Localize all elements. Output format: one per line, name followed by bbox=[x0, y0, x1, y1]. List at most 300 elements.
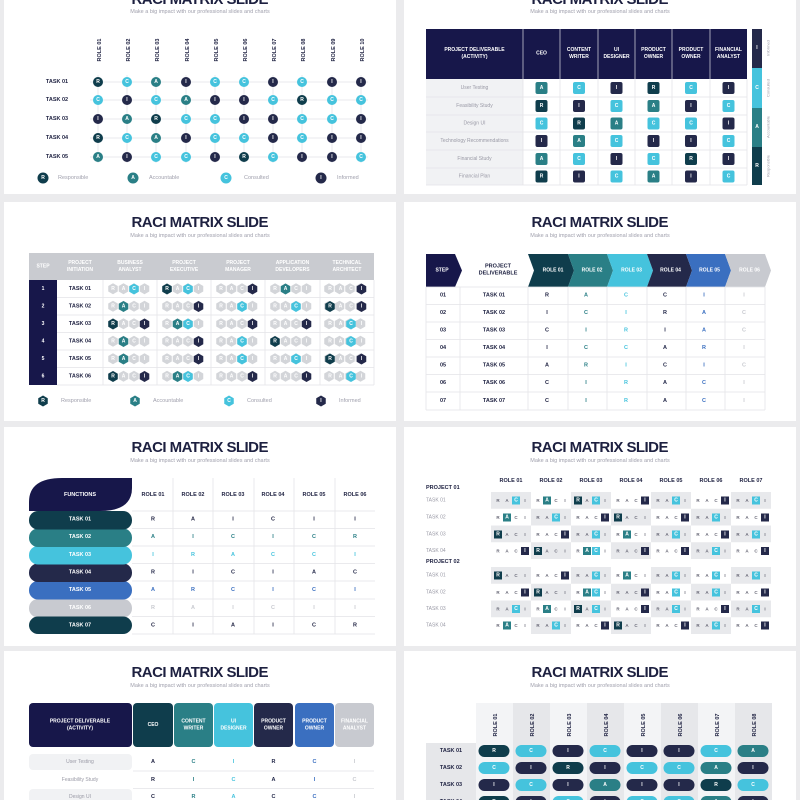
table body: R bbox=[584, 362, 588, 368]
pill grid: CIRICCAI bbox=[492, 765, 754, 771]
table body: I bbox=[585, 380, 587, 386]
table body: C bbox=[742, 310, 746, 316]
table body: TASK 06 bbox=[483, 380, 505, 386]
task labels: TASK 05 bbox=[46, 154, 68, 160]
table body: 07 bbox=[440, 398, 446, 404]
role headers: ROLE 01 bbox=[97, 39, 103, 61]
table body: TASK 02 bbox=[483, 310, 505, 316]
role table: RAICII bbox=[151, 516, 356, 522]
table body: C bbox=[663, 292, 667, 298]
rows: I bbox=[354, 794, 356, 800]
table body: TASK 03 bbox=[483, 328, 505, 334]
hex grid: TASK 06 bbox=[69, 374, 91, 380]
role header columns: ROLE 03 bbox=[567, 714, 573, 736]
table body: R bbox=[702, 345, 706, 351]
table body: I bbox=[743, 398, 745, 404]
table header: DESIGNER bbox=[603, 54, 630, 60]
row 5 bbox=[111, 354, 366, 364]
project labels: TASK 02 bbox=[426, 590, 446, 596]
role table: AICICR bbox=[151, 534, 357, 540]
project 02 grid: RICACCC bbox=[496, 572, 758, 578]
table body: RICAIC bbox=[540, 174, 731, 180]
task labels: TASK 01 bbox=[46, 79, 68, 85]
rows: Design UI bbox=[69, 794, 91, 800]
chevron header: STEP bbox=[435, 268, 449, 274]
legend: I bbox=[320, 175, 322, 181]
role table bbox=[132, 478, 375, 634]
role header columns: ROLE 05 bbox=[641, 714, 647, 736]
panel: slide 6 project checker matrix bbox=[404, 427, 796, 646]
project labels: TASK 02 bbox=[426, 514, 446, 520]
functions column: TASK 07 bbox=[69, 622, 91, 628]
functions column: TASK 01 bbox=[69, 516, 91, 522]
role header columns: ROLE 07 bbox=[715, 714, 721, 736]
role table: CIAICR bbox=[151, 622, 357, 628]
header blocks: OWNER bbox=[305, 726, 324, 732]
task labels: TASK 03 bbox=[440, 782, 462, 788]
table body: TASK 04 bbox=[483, 345, 506, 351]
role headers: ROLE 01 bbox=[500, 478, 522, 484]
legend: Informed bbox=[339, 398, 361, 404]
table header: OWNER bbox=[681, 54, 701, 60]
table body: Technology Recommendations bbox=[440, 138, 509, 144]
project labels: TASK 03 bbox=[426, 532, 446, 538]
role header columns: ROLE 01 bbox=[493, 714, 499, 736]
project 01 grid: ACIRICI bbox=[505, 514, 766, 520]
legend bbox=[38, 396, 361, 406]
legend: Consulted bbox=[244, 175, 269, 181]
subtitle: Make a big impact with our professional slides and charts bbox=[530, 458, 670, 464]
project 01 grid: CARCICIC bbox=[514, 498, 758, 504]
pill grid bbox=[478, 745, 768, 800]
role table: RAICII bbox=[151, 605, 356, 611]
role headers: ROLE 02 bbox=[126, 39, 132, 61]
panel: slide 1 circle matrix bbox=[4, 0, 396, 194]
table header: TECHNICAL bbox=[333, 260, 361, 266]
rows: C bbox=[151, 794, 155, 800]
legend: Accountable bbox=[153, 398, 183, 404]
row 3: RACIRACIRACIRACIRACI bbox=[111, 321, 363, 327]
task labels bbox=[46, 79, 69, 160]
side legend bar: I bbox=[756, 45, 758, 51]
role headers: ROLE 04 bbox=[620, 478, 643, 484]
functions column: TASK 02 bbox=[69, 534, 91, 540]
table header: APPLICATION bbox=[276, 260, 310, 266]
table body: ACICRI bbox=[540, 156, 730, 162]
subtitle: Make a big impact with our professional slides and charts bbox=[130, 458, 270, 464]
rows: C bbox=[353, 777, 357, 783]
header blocks: PROJECT DELIVERABLE bbox=[50, 718, 111, 724]
chevron header: ROLE 06 bbox=[739, 268, 760, 274]
table body: C bbox=[584, 345, 588, 351]
subtitle: Make a big impact with our professional slides and charts bbox=[130, 233, 270, 239]
table body: Financial Study bbox=[457, 156, 492, 162]
rows: Feasibility Study bbox=[62, 777, 99, 783]
table body: RICAIC bbox=[540, 103, 731, 109]
table body: I bbox=[546, 345, 548, 351]
step column: 4 bbox=[42, 338, 45, 344]
project labels: TASK 04 bbox=[426, 548, 446, 554]
table body: TASK 05 bbox=[483, 362, 505, 368]
table header: PROJECT bbox=[172, 260, 196, 266]
functions column: TASK 03 bbox=[69, 552, 91, 558]
hex grid bbox=[57, 280, 374, 385]
table body: C bbox=[663, 362, 667, 368]
rows: C bbox=[192, 759, 196, 765]
subtitle: Make a big impact with our professional slides and charts bbox=[130, 9, 270, 15]
table body: 04 bbox=[440, 345, 447, 351]
table header bbox=[426, 29, 747, 79]
table body: 05 bbox=[440, 362, 446, 368]
table header: INITIATION bbox=[67, 267, 93, 273]
step column: 2 bbox=[42, 304, 45, 310]
hex grid: TASK 05 bbox=[69, 356, 91, 362]
row 1: RACIRACIRACIRACIRACI bbox=[111, 286, 363, 292]
table body: R bbox=[624, 380, 628, 386]
chevron header: ROLE 02 bbox=[582, 268, 603, 274]
circle grid: RCAICCICII bbox=[96, 135, 362, 141]
role table: ROLE 04 bbox=[262, 492, 285, 498]
legend: Responsible bbox=[61, 398, 91, 404]
table body: ACIRCI bbox=[540, 85, 730, 91]
table body: 03 bbox=[440, 328, 446, 334]
pill grid: ICIAIIRC bbox=[493, 782, 755, 788]
table header: PRODUCT bbox=[679, 47, 703, 53]
table body: A bbox=[663, 380, 667, 386]
table body: Design UI bbox=[464, 120, 485, 126]
title: RACI MATRIX SLIDE bbox=[132, 214, 268, 231]
side legend bar: R bbox=[755, 163, 759, 169]
title: RACI MATRIX SLIDE bbox=[532, 664, 668, 681]
table header: MANAGER bbox=[225, 267, 251, 273]
chevron header: PROJECT bbox=[485, 264, 512, 270]
table body: I bbox=[546, 310, 548, 316]
table body: A bbox=[663, 345, 667, 351]
table body bbox=[426, 79, 747, 185]
title: RACI MATRIX SLIDE bbox=[532, 439, 668, 456]
side legend bar: C bbox=[755, 85, 759, 91]
hex grid: TASK 02 bbox=[69, 304, 91, 310]
table body: A bbox=[584, 292, 588, 298]
role header columns bbox=[476, 703, 772, 800]
project 02 grid: RACIRACIRACIRACIRACIRACIRACI bbox=[496, 590, 766, 595]
functions column: FUNCTIONS bbox=[64, 492, 96, 498]
table header: PRODUCT bbox=[641, 47, 666, 53]
role headers: ROLE 06 bbox=[700, 478, 722, 484]
header blocks: (ACTIVITY) bbox=[67, 726, 93, 732]
panel: slide 8 pill matrix bbox=[404, 651, 796, 800]
project 01 grid: IRACIICI bbox=[524, 548, 766, 554]
header blocks: WRITER bbox=[184, 726, 204, 732]
role table: IRACCI bbox=[152, 552, 356, 558]
role headers: ROLE 10 bbox=[360, 39, 366, 61]
role headers: ROLE 03 bbox=[155, 39, 161, 61]
table body: C bbox=[584, 310, 588, 316]
panel: slide 4 chevron header table bbox=[404, 202, 796, 421]
subtitle: Make a big impact with our professional slides and charts bbox=[530, 9, 670, 15]
legend: R bbox=[41, 175, 45, 181]
project 01 grid: RACIRACIRACIRACIRACIRACIRACI bbox=[496, 498, 766, 503]
row 6: RACIRACIRACIRACIRACI bbox=[111, 374, 363, 380]
table body: CRACCI bbox=[540, 120, 730, 126]
table body: C bbox=[624, 292, 628, 298]
table body: I bbox=[743, 380, 745, 386]
project labels bbox=[426, 485, 460, 628]
task labels: TASK 02 bbox=[46, 97, 68, 103]
table body: C bbox=[742, 328, 746, 334]
step column: 6 bbox=[42, 374, 45, 380]
role headers: ROLE 07 bbox=[272, 39, 278, 61]
table body: R bbox=[545, 292, 549, 298]
rows: A bbox=[232, 794, 236, 800]
legend: A bbox=[133, 398, 137, 404]
row 6 bbox=[108, 371, 363, 382]
table body: I bbox=[703, 362, 705, 368]
table body: Financial Plan bbox=[459, 174, 490, 180]
circle grid: IARCCIICCI bbox=[97, 116, 362, 122]
table body: A bbox=[663, 398, 667, 404]
row 2: RACIRACIRACIRACIRACI bbox=[111, 304, 363, 310]
title: RACI MATRIX SLIDE bbox=[532, 214, 668, 231]
project labels: TASK 04 bbox=[426, 622, 446, 628]
legend: Accountable bbox=[149, 175, 179, 181]
hex grid: TASK 01 bbox=[69, 286, 91, 292]
table header: ANALYST bbox=[118, 267, 142, 273]
header blocks: PRODUCT bbox=[261, 718, 286, 724]
row 5: RACIRACIRACIRACIRACI bbox=[111, 356, 363, 362]
project labels: PROJECT 02 bbox=[426, 559, 460, 565]
table header: FINANCIAL bbox=[715, 47, 742, 53]
header blocks: CEO bbox=[148, 722, 159, 728]
table body: C bbox=[545, 328, 549, 334]
chevron header: ROLE 01 bbox=[543, 268, 564, 274]
table body: I bbox=[664, 328, 666, 334]
table body: C bbox=[624, 345, 628, 351]
project 02 grid: ACIRICI bbox=[505, 622, 766, 628]
rows: C bbox=[272, 794, 276, 800]
rows: I bbox=[314, 777, 316, 783]
step column: 1 bbox=[42, 286, 45, 292]
task labels: TASK 03 bbox=[46, 116, 68, 122]
table header: STEP bbox=[36, 264, 50, 270]
table body: TASK 01 bbox=[483, 292, 505, 298]
project labels: PROJECT 01 bbox=[426, 485, 460, 491]
role headers: ROLE 05 bbox=[214, 39, 220, 61]
table header: ANALYST bbox=[717, 54, 740, 60]
role headers: ROLE 03 bbox=[580, 478, 602, 484]
circle grid: AICCIRCIIC bbox=[96, 154, 363, 160]
role table: ROLE 06 bbox=[344, 492, 366, 498]
project 02 grid: IRACICCI bbox=[524, 590, 766, 596]
rows: A bbox=[151, 759, 155, 765]
table body: 02 bbox=[440, 310, 446, 316]
chevron header bbox=[426, 254, 771, 287]
table body: C bbox=[702, 398, 706, 404]
row 2 bbox=[111, 301, 366, 312]
chevron header: ROLE 03 bbox=[621, 268, 642, 274]
role headers: ROLE 09 bbox=[331, 39, 337, 61]
task labels bbox=[426, 743, 476, 800]
step column: 5 bbox=[42, 356, 45, 362]
header blocks: ANALYST bbox=[343, 726, 366, 732]
role table: ROLE 03 bbox=[222, 492, 244, 498]
header blocks: PRODUCT bbox=[302, 718, 327, 724]
table header: PROJECT bbox=[68, 260, 92, 266]
table body: 01 bbox=[440, 292, 446, 298]
step column bbox=[29, 280, 57, 385]
rows: R bbox=[151, 777, 155, 783]
table header: WRITER bbox=[569, 54, 589, 60]
table header: OWNER bbox=[644, 54, 663, 60]
circle grid: RCAICCICII bbox=[96, 79, 362, 85]
side legend bar: Informed bbox=[766, 40, 770, 56]
chevron header: ROLE 04 bbox=[660, 268, 681, 274]
table body: A bbox=[545, 362, 549, 368]
project 02 grid: RACIRACIRACIRACIRACIRACIRACI bbox=[496, 573, 766, 578]
legend: C bbox=[227, 398, 231, 404]
role table: ROLE 05 bbox=[303, 492, 325, 498]
table body bbox=[426, 287, 765, 410]
row 4 bbox=[111, 336, 363, 347]
panel: slide 2 deliverable table with side legend bbox=[404, 0, 796, 194]
table body: I bbox=[743, 292, 745, 298]
project 02 grid: RACIRACIRACIRACIRACIRACIRACI bbox=[496, 623, 766, 628]
role header columns: ROLE 06 bbox=[678, 714, 684, 736]
header blocks: DESIGNER bbox=[220, 726, 247, 732]
header blocks: FINANCIAL bbox=[341, 718, 368, 724]
table body: Feasibility Study bbox=[456, 103, 493, 109]
chevron header: ROLE 05 bbox=[699, 268, 720, 274]
title: RACI MATRIX SLIDE bbox=[132, 439, 268, 456]
panel: slide 5 functions table bbox=[4, 427, 396, 646]
role headers bbox=[97, 38, 366, 61]
role headers: ROLE 08 bbox=[301, 39, 307, 61]
table header: ARCHITECT bbox=[333, 267, 361, 273]
table body: R bbox=[624, 328, 628, 334]
rows: I bbox=[354, 759, 356, 765]
step column: 3 bbox=[42, 321, 45, 327]
row 3 bbox=[108, 318, 363, 330]
legend: R bbox=[41, 398, 45, 404]
row 4: RACIRACIRACIRACIRACI bbox=[111, 338, 363, 344]
task labels: TASK 01 bbox=[440, 748, 462, 754]
panel: slide 3 hexagon matrix bbox=[4, 202, 396, 421]
task labels: TASK 04 bbox=[46, 135, 69, 141]
legend: Informed bbox=[337, 175, 359, 181]
role table: ROLE 02 bbox=[182, 492, 204, 498]
rows: C bbox=[232, 777, 236, 783]
table header: (ACTIVITY) bbox=[461, 54, 488, 60]
task labels: TASK 02 bbox=[440, 765, 462, 771]
role header columns: ROLE 08 bbox=[752, 714, 758, 736]
project labels: TASK 03 bbox=[426, 606, 446, 612]
role headers: ROLE 06 bbox=[243, 39, 249, 61]
table header: BUSINESS bbox=[117, 260, 143, 266]
legend bbox=[38, 172, 359, 184]
table body: I bbox=[585, 328, 587, 334]
role table: ROLE 01 bbox=[142, 492, 164, 498]
table body: IACIIC bbox=[541, 138, 731, 144]
functions column: TASK 06 bbox=[69, 605, 91, 611]
project 02 grid: RACIRACIRACIRACIRACIRACIRACI bbox=[496, 606, 766, 612]
role headers: ROLE 05 bbox=[660, 478, 682, 484]
rows: C bbox=[313, 794, 317, 800]
rows: I bbox=[233, 759, 235, 765]
table body: R bbox=[663, 310, 667, 316]
role header columns: ROLE 02 bbox=[530, 714, 536, 736]
rows: I bbox=[193, 777, 195, 783]
functions column bbox=[29, 478, 132, 634]
role header columns: ROLE 04 bbox=[604, 713, 610, 736]
hex grid: TASK 04 bbox=[69, 338, 92, 344]
role table: RICIAC bbox=[151, 570, 357, 576]
table header: CEO bbox=[536, 50, 547, 56]
circle grid bbox=[93, 77, 366, 162]
table body: I bbox=[625, 310, 627, 316]
legend: A bbox=[131, 175, 135, 181]
project 01 grid: RACIRACIRACIRACIRACIRACIRACI bbox=[496, 515, 766, 520]
side legend bar bbox=[752, 29, 770, 185]
role headers: ROLE 07 bbox=[740, 478, 762, 484]
table header: UI bbox=[614, 47, 620, 53]
table body: R bbox=[624, 398, 628, 404]
table header: EXECUTIVE bbox=[170, 267, 199, 273]
side legend bar: Accountable bbox=[766, 115, 770, 138]
table header: PROJECT bbox=[226, 260, 250, 266]
rows: R bbox=[272, 759, 276, 765]
table body: I bbox=[743, 345, 745, 351]
functions column: TASK 05 bbox=[69, 587, 91, 593]
table body: C bbox=[702, 380, 706, 386]
project 01 grid bbox=[491, 492, 771, 559]
hex grid: TASK 03 bbox=[69, 321, 91, 327]
table header: DEVELOPERS bbox=[275, 267, 310, 273]
table body: 06 bbox=[440, 380, 446, 386]
subtitle: Make a big impact with our professional slides and charts bbox=[530, 233, 670, 239]
rows: A bbox=[272, 777, 276, 783]
legend: C bbox=[224, 175, 228, 181]
table body: A bbox=[702, 328, 706, 334]
legend: Responsible bbox=[58, 175, 88, 181]
table body: TASK 07 bbox=[483, 398, 505, 404]
project 02 grid bbox=[491, 567, 771, 634]
table body: I bbox=[585, 398, 587, 404]
table body: C bbox=[545, 398, 549, 404]
pill grid: RCICIICA bbox=[492, 748, 755, 754]
legend: Consulted bbox=[247, 398, 272, 404]
project 02 grid: CARCICIC bbox=[514, 606, 758, 612]
table body: I bbox=[703, 292, 705, 298]
panel: slide 7 rounded header table bbox=[4, 651, 396, 800]
chevron header: DELIVERABLE bbox=[479, 270, 518, 276]
table body: C bbox=[545, 380, 549, 386]
subtitle: Make a big impact with our professional slides and charts bbox=[130, 683, 270, 689]
table body: A bbox=[702, 310, 706, 316]
rows: R bbox=[192, 794, 196, 800]
role headers: ROLE 02 bbox=[540, 478, 562, 484]
side legend bar: Consulted bbox=[766, 79, 770, 97]
row 1 bbox=[111, 284, 366, 294]
role headers: ROLE 04 bbox=[185, 38, 191, 61]
rows: C bbox=[313, 759, 317, 765]
project 01 grid: RICACIC bbox=[496, 532, 758, 538]
side legend bar: A bbox=[755, 124, 759, 130]
header blocks: OWNER bbox=[264, 726, 283, 732]
subtitle: Make a big impact with our professional slides and charts bbox=[530, 683, 670, 689]
header blocks: UI bbox=[231, 718, 237, 724]
header blocks: CONTENT bbox=[181, 718, 206, 724]
table body: C bbox=[742, 362, 746, 368]
